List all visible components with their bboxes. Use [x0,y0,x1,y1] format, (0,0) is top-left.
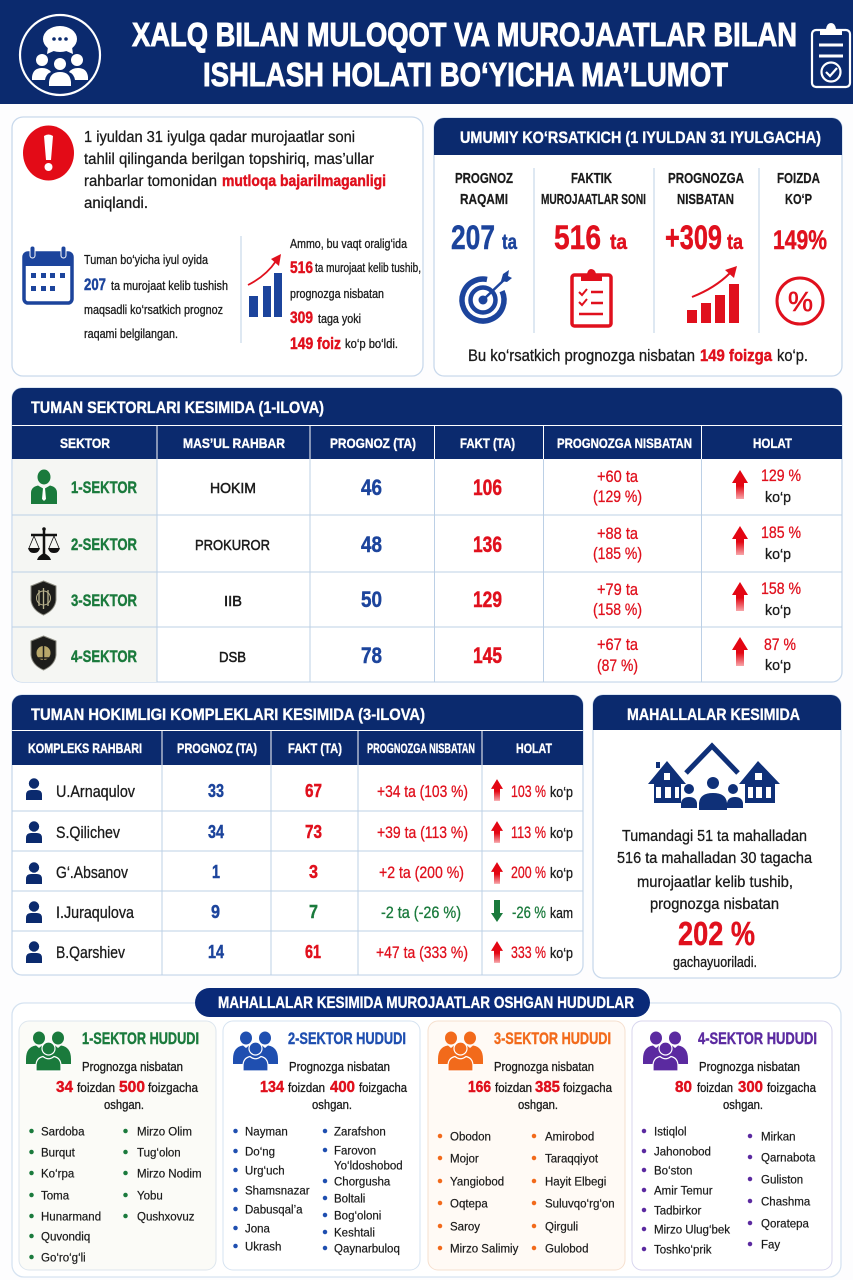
card 1 mahalla list: Ko‘rpa [41,1168,75,1180]
row: 3-sector: 50 [361,587,382,612]
row: U.Arnaqulov: 103 % [511,782,546,801]
mahalla description: prognozga nisbatan [650,896,779,913]
table column headers [12,426,842,459]
row: 4-sector: 145 [473,643,502,668]
card 1 mahalla list: Qushxovuz [137,1212,195,1224]
notice text: aniqlandi. [84,195,148,212]
row: U.Arnaqulov: +34 ta (103 %) [377,782,468,801]
card 4 mahalla list: Fay [761,1240,780,1252]
card 2 summary: oshgan. [312,1098,352,1112]
row: B.Qarshiev: 61 [305,942,321,962]
indicator: percent: FOIZDA [777,170,820,187]
card 1 summary [56,1060,198,1112]
card 1 mahalla list [32,1126,202,1264]
actual explanation: 149 foiz [290,334,341,353]
table column headers: PROGNOZGA NISBATAN [557,435,692,451]
panel heading: MAHALLALAR KESIMIDA [627,705,800,724]
card 3 mahalla list: Mojor [450,1154,479,1166]
table title: TUMAN HOKIMLIGI KOMPLEKLARI KESIMIDA (3-ILOVA) [31,705,425,724]
table title [12,388,842,425]
row: 3-sector: 129 [473,587,502,612]
table column headers: PROGNOZ (TA) [177,740,257,756]
card 4 summary: foizgacha [767,1081,816,1095]
indicator: actual: ta [610,231,627,254]
card: sector 2: 2-SEKTOR HUDUDI [288,1030,406,1048]
row: 3-sector: (158 %) [593,600,642,619]
table column headers: FAKT (TA) [460,435,515,451]
row: U.Arnaqulov: 33 [208,781,224,801]
card 1 mahalla list: Mirzo Nodim [137,1168,202,1180]
actual explanation: taga yoki [318,311,361,326]
icon: red alert [23,126,74,180]
card 1 mahalla list: Mirzo Olim [137,1126,192,1138]
card 3 summary [468,1060,612,1112]
card 4 mahalla list: Amir Temur [654,1186,713,1198]
actual explanation: ko‘p bo‘ldi. [345,336,398,351]
row: 2-sector: (185 %) [593,544,642,563]
table column headers: MAS’UL RAHBAR [183,435,285,451]
mahalla description: gachayuoriladi. [673,954,757,971]
card: sector 3 [428,1021,625,1270]
icon: blue group [233,1032,278,1071]
card 1 mahalla list: Toma [41,1190,70,1202]
row: B.Qarshiev: 333 % [511,943,546,962]
row: 1-sector: 46 [361,475,382,500]
card 3 mahalla list: Yangiobod [450,1176,504,1188]
card 1 summary: foizdan [77,1081,115,1095]
table column headers: FAKT (TA) [288,740,342,756]
card 4 mahalla list [644,1126,816,1256]
card 2 mahalla list: Jona [245,1224,271,1236]
card 1 mahalla list: Tug‘olon [137,1148,181,1160]
actual explanation: 516 [290,258,313,277]
actual explanation: ta murojaat kelib tushib, [315,260,421,275]
card 1 mahalla list: Yobu [137,1190,163,1202]
row: G'.Absanov: ko‘p [550,865,573,882]
row: 2-sector: +88 ta [597,524,638,543]
icon: red checklist [572,269,611,326]
row: U.Arnaqulov: 67 [305,781,322,801]
card 2 mahalla list: Zarafshon [334,1126,386,1138]
card 4 summary [675,1060,816,1112]
card 3 mahalla list: Saroy [450,1222,480,1234]
card 4 summary: 80 [675,1079,692,1096]
card 4 mahalla list: Guliston [761,1174,803,1186]
icon: orange group [438,1032,483,1071]
row: 3-sector: ko‘p [765,602,791,619]
card 1 mahalla list: Go‘ro‘g‘li [41,1252,86,1264]
row: G'.Absanov: G‘.Absanov [56,863,128,882]
notice text: tahlil qilinganda berilgan topshiriq, mas’ullar [84,151,375,168]
indicator: difference: NISBATAN [677,191,734,208]
notice text: 1 iyuldan 31 iyulga qadar murojaatlar soni [84,129,355,146]
row: 4-sector: 78 [361,643,382,668]
forecast explanation [84,252,228,341]
card 2 mahalla list: Boltali [334,1194,365,1206]
card 1 mahalla list: Quvondiq [41,1232,90,1244]
forecast explanation: Tuman bo‘yicha iyul oyida [84,252,209,267]
card 3 mahalla list: Oqtepa [450,1198,488,1210]
row: 1-sector: HOKIM [210,481,256,497]
row: S.Qilichev [26,821,573,843]
icon: red growth bars [687,266,739,323]
icon: purple group [643,1032,688,1071]
indicator: forecast: 207 [451,219,495,257]
icon: security shield [31,636,56,670]
card 2 summary: foizdan [288,1081,325,1095]
row: G'.Absanov [26,862,573,884]
panel: summary notice [12,117,423,376]
card: sector 3: 3-SEKTOR HUDUDI [494,1030,611,1048]
forecast explanation: maqsadli ko‘rsatkich prognoz [84,302,223,317]
row: I.Juraqulova: 7 [309,902,318,922]
indicator: forecast: RAQAMI [460,191,508,208]
row: S.Qilichev: +39 ta (113 %) [377,823,468,842]
card 3 summary: 166 [468,1079,491,1096]
card 2 mahalla list: Shamsnazar [245,1186,310,1198]
row: S.Qilichev: 34 [208,822,224,842]
row: 4-sector: +67 ta [597,635,638,654]
card 1 summary: 500 [119,1079,145,1096]
indicator: difference: PROGNOZGA [668,170,744,187]
row: I.Juraqulova: -2 ta (-26 %) [381,903,461,922]
card 3 mahalla list [440,1132,615,1256]
mahalla description [617,828,812,971]
card 4 summary: oshgan. [723,1098,763,1112]
card 4 mahalla list: Mirkan [761,1132,796,1144]
card 4 summary: foizdan [697,1081,733,1095]
row: 1-sector: 129 % [761,466,801,485]
card 2 mahalla list: Urg‘uch [245,1166,285,1178]
row: 3-sector: 3-SEKTOR [71,592,137,610]
card 4 mahalla list: Toshko‘prik [654,1244,712,1256]
card 2 mahalla list: Dabusqal’a [245,1204,303,1216]
card 1 mahalla list: Sardoba [41,1126,85,1138]
icon: people in dialogue [20,15,100,95]
indicator conclusion: ko‘p. [777,346,808,365]
row: 3-sector: IIB [224,594,242,610]
card 2 summary: 400 [330,1079,355,1096]
row: 1-sector: (129 %) [593,487,642,506]
forecast explanation: 207 [84,275,106,294]
row: G'.Absanov: 1 [212,862,220,882]
card 4 mahalla list: Chashma [761,1196,811,1208]
card: sector 4: 4-SEKTOR HUDUDI [698,1030,817,1048]
card: sector 1: 1-SEKTOR HUDUDI [82,1030,199,1048]
row: B.Qarshiev [26,941,573,963]
icon: green group [26,1032,71,1071]
row: B.Qarshiev: +47 ta (333 %) [376,943,468,962]
panel: mahallas [593,695,841,978]
row: S.Qilichev: ko‘p [550,825,573,842]
table panel: hokimlik complexes [12,695,583,975]
card 2 mahalla list: Do‘ng [245,1146,275,1158]
table column headers: PROGNOZ (TA) [330,435,416,451]
row: I.Juraqulova: 9 [211,902,220,922]
row: 3-sector [31,579,801,619]
actual explanation: prognozga nisbatan [290,286,384,301]
card 4 mahalla list: Bo‘ston [654,1166,692,1178]
panel heading [593,695,841,730]
indicator: difference: ta [727,231,743,254]
row: U.Arnaqulov: U.Arnaqulov [56,782,135,801]
row: 1-sector [31,466,801,506]
card 1 summary: foizgacha [148,1081,198,1095]
section: growth areas [12,988,841,1277]
card 3 mahalla list: Gulobod [545,1244,588,1256]
card 4 summary: Prognozga nisbatan [699,1060,800,1074]
indicator conclusion: 149 foizga [700,346,772,365]
actual explanation [290,236,421,353]
card 3 mahalla list: Qirguli [545,1222,578,1234]
icon: checklist clipboard [812,23,850,87]
card 4 mahalla list: Jahonobod [654,1146,711,1158]
forecast explanation: raqami belgilangan. [84,326,178,341]
table column headers: PROGNOZGA NISBATAN [367,740,475,756]
indicator: percent: KO‘P [785,191,812,208]
row: 4-sector [31,635,796,675]
row: S.Qilichev: S.Qilichev [56,823,120,842]
mahalla description: 516 ta mahalladan 30 tagacha [617,850,812,867]
header banner [0,0,853,104]
actual explanation: 309 [290,308,313,327]
icon: percent badge: % [788,286,813,317]
card 3 mahalla list: Suluvqo‘rg‘on [545,1198,615,1210]
card 4 mahalla list: Istiqlol [654,1126,687,1138]
card: sector 2 [223,1021,420,1270]
indicator: actual: MUROJAATLAR SONI [541,191,646,208]
card 3 mahalla list: Hayit Elbegi [545,1176,606,1188]
card 3 mahalla list: Mirzo Salimiy [450,1244,519,1256]
card 2 summary [260,1060,407,1112]
indicator: forecast: PROGNOZ [455,170,513,187]
card 3 mahalla list: Amirobod [545,1132,594,1144]
card 4 mahalla list: Mirzo Ulug‘bek [654,1224,730,1236]
card 2 mahalla list: Bog‘oloni [334,1210,381,1222]
indicator: forecast: ta [502,231,517,254]
row: B.Qarshiev: B.Qarshiev [56,943,125,962]
indicator: difference: +309 [665,219,722,257]
icon: police shield [31,581,56,615]
row: 4-sector: 87 % [764,635,796,654]
card 3 summary: foizgacha [563,1081,612,1095]
card 3 summary: oshgan. [518,1098,558,1112]
card 2 mahalla list [236,1126,403,1256]
table title: TUMAN SEKTORLARI KESIMIDA (1-ILOVA) [31,398,324,417]
row: 2-sector: ko‘p [765,546,791,563]
table column headers [12,731,583,765]
card 3 summary: foizdan [495,1081,532,1095]
actual explanation: Ammo, bu vaqt oralig‘ida [290,236,408,251]
table title [12,695,583,730]
forecast explanation: ta murojaat kelib tushish [111,278,228,293]
table column headers: KOMPLEKS RAHBARI [28,740,142,756]
panel: overall indicators [434,118,842,376]
card 2 summary: foizgacha [359,1081,407,1095]
row: 3-sector: +79 ta [597,580,638,599]
card 1 summary: Prognozga nisbatan [82,1060,183,1074]
row: B.Qarshiev: ko‘p [550,945,573,962]
table column headers: HOLAT [753,435,792,451]
panel heading [434,118,842,155]
indicator: percent: 149% [773,225,827,255]
row: 4-sector: 4-SEKTOR [71,648,137,666]
row: G'.Absanov: +2 ta (200 %) [379,863,464,882]
row: I.Juraqulova [26,900,573,923]
card 3 summary: Prognozga nisbatan [494,1060,594,1074]
card 2 mahalla list: Keshtali [334,1228,375,1240]
row: 2-sector: 185 % [761,523,801,542]
card 2 mahalla list: Farovon [334,1146,376,1158]
row: 4-sector: DSB [219,650,246,666]
mahalla description: 202 % [678,915,755,952]
row: I.Juraqulova: -26 % [512,903,546,922]
mahalla description: Tumandagi 51 ta mahalladan [622,828,807,845]
notice text: mutloqa bajarilmaganligi [222,173,386,190]
card 1 mahalla list: Burqut [41,1148,76,1160]
card 1 summary: oshgan. [104,1098,144,1112]
card 2 mahalla list: Ukrash [245,1242,281,1254]
row: B.Qarshiev: 14 [208,942,224,962]
row: 3-sector: 158 % [761,579,801,598]
row: 2-sector: 48 [361,532,382,557]
icon: calendar [23,246,73,303]
indicator: difference [665,170,744,323]
row: S.Qilichev: 73 [305,822,322,842]
row: 1-sector: ko‘p [765,489,791,506]
row: S.Qilichev: 113 % [511,823,546,842]
card 2 mahalla list: Nayman [245,1126,288,1138]
row: 1-sector: 106 [473,475,502,500]
row: U.Arnaqulov [26,778,573,801]
icon: neighbourhood houses and people [648,746,780,810]
card 4 mahalla list: Qarnabota [761,1152,816,1164]
section title pill [195,988,650,1017]
row: 2-sector: PROKUROR [195,538,270,554]
section title pill: MAHALLALAR KESIMIDA MUROJAATLAR OSHGAN HUDUDLAR [218,993,634,1012]
card: sector 1 [19,1021,216,1270]
card 3 summary: 385 [535,1079,560,1096]
icon: official [31,470,57,504]
card 2 summary: 134 [260,1079,284,1096]
icon: scales [28,527,60,560]
card 2 mahalla list: Qaynarbuloq [334,1244,400,1256]
indicator: percent [773,170,827,324]
card 4 mahalla list: Qoratepa [761,1218,810,1230]
table column headers: SEKTOR [60,435,110,451]
indicator: actual: 516 [554,219,601,257]
indicator: forecast [451,170,517,328]
row: G'.Absanov: 200 % [511,863,546,882]
card 4 mahalla list: Tadbirkor [654,1206,701,1218]
notice text [84,129,386,212]
title: ISHLASH HOLATI BO‘YICHA MA’LUMOT [203,56,728,93]
icon: target [455,270,512,328]
notice text: rahbarlar tomonidan [84,173,217,190]
table panel: district sectors [12,388,842,682]
title [132,16,797,93]
row: I.Juraqulova: I.Juraqulova [56,903,134,922]
row: 1-sector: 1-SEKTOR [71,479,137,497]
card 1 mahalla list: Hunarmand [41,1212,101,1224]
icon: rising bars [248,254,282,317]
row: U.Arnaqulov: ko‘p [550,784,573,801]
card 2 summary: Prognozga nisbatan [289,1060,390,1074]
card 1 summary: 34 [56,1079,73,1096]
card 3 mahalla list: Taraqqiyot [545,1154,599,1166]
card 3 mahalla list: Obodon [450,1132,491,1144]
row: I.Juraqulova: kam [550,905,573,922]
row: 2-sector: 2-SEKTOR [71,536,137,554]
indicator conclusion: Bu ko‘rsatkich prognozga nisbatan [468,346,695,365]
row: 2-sector [28,523,801,563]
icon: percent badge [777,278,823,324]
table column headers: HOLAT [516,740,552,756]
indicator: actual: FAKTIK [571,170,612,187]
card 2 mahalla list: Chorgusha [334,1176,391,1188]
row: G'.Absanov: 3 [309,862,318,882]
indicator: actual [541,170,646,326]
row: 4-sector: ko‘p [765,657,791,674]
row: 2-sector: 136 [473,532,502,557]
mahalla description: murojaatlar kelib tushib, [637,874,793,891]
card 4 summary: 300 [738,1079,763,1096]
row: 1-sector: +60 ta [597,467,638,486]
icon: green down arrow [491,900,503,922]
row: 4-sector: (87 %) [597,656,638,675]
card 2 mahalla list: Yo‘ldoshobod [334,1160,403,1172]
card: sector 4 [632,1021,832,1270]
